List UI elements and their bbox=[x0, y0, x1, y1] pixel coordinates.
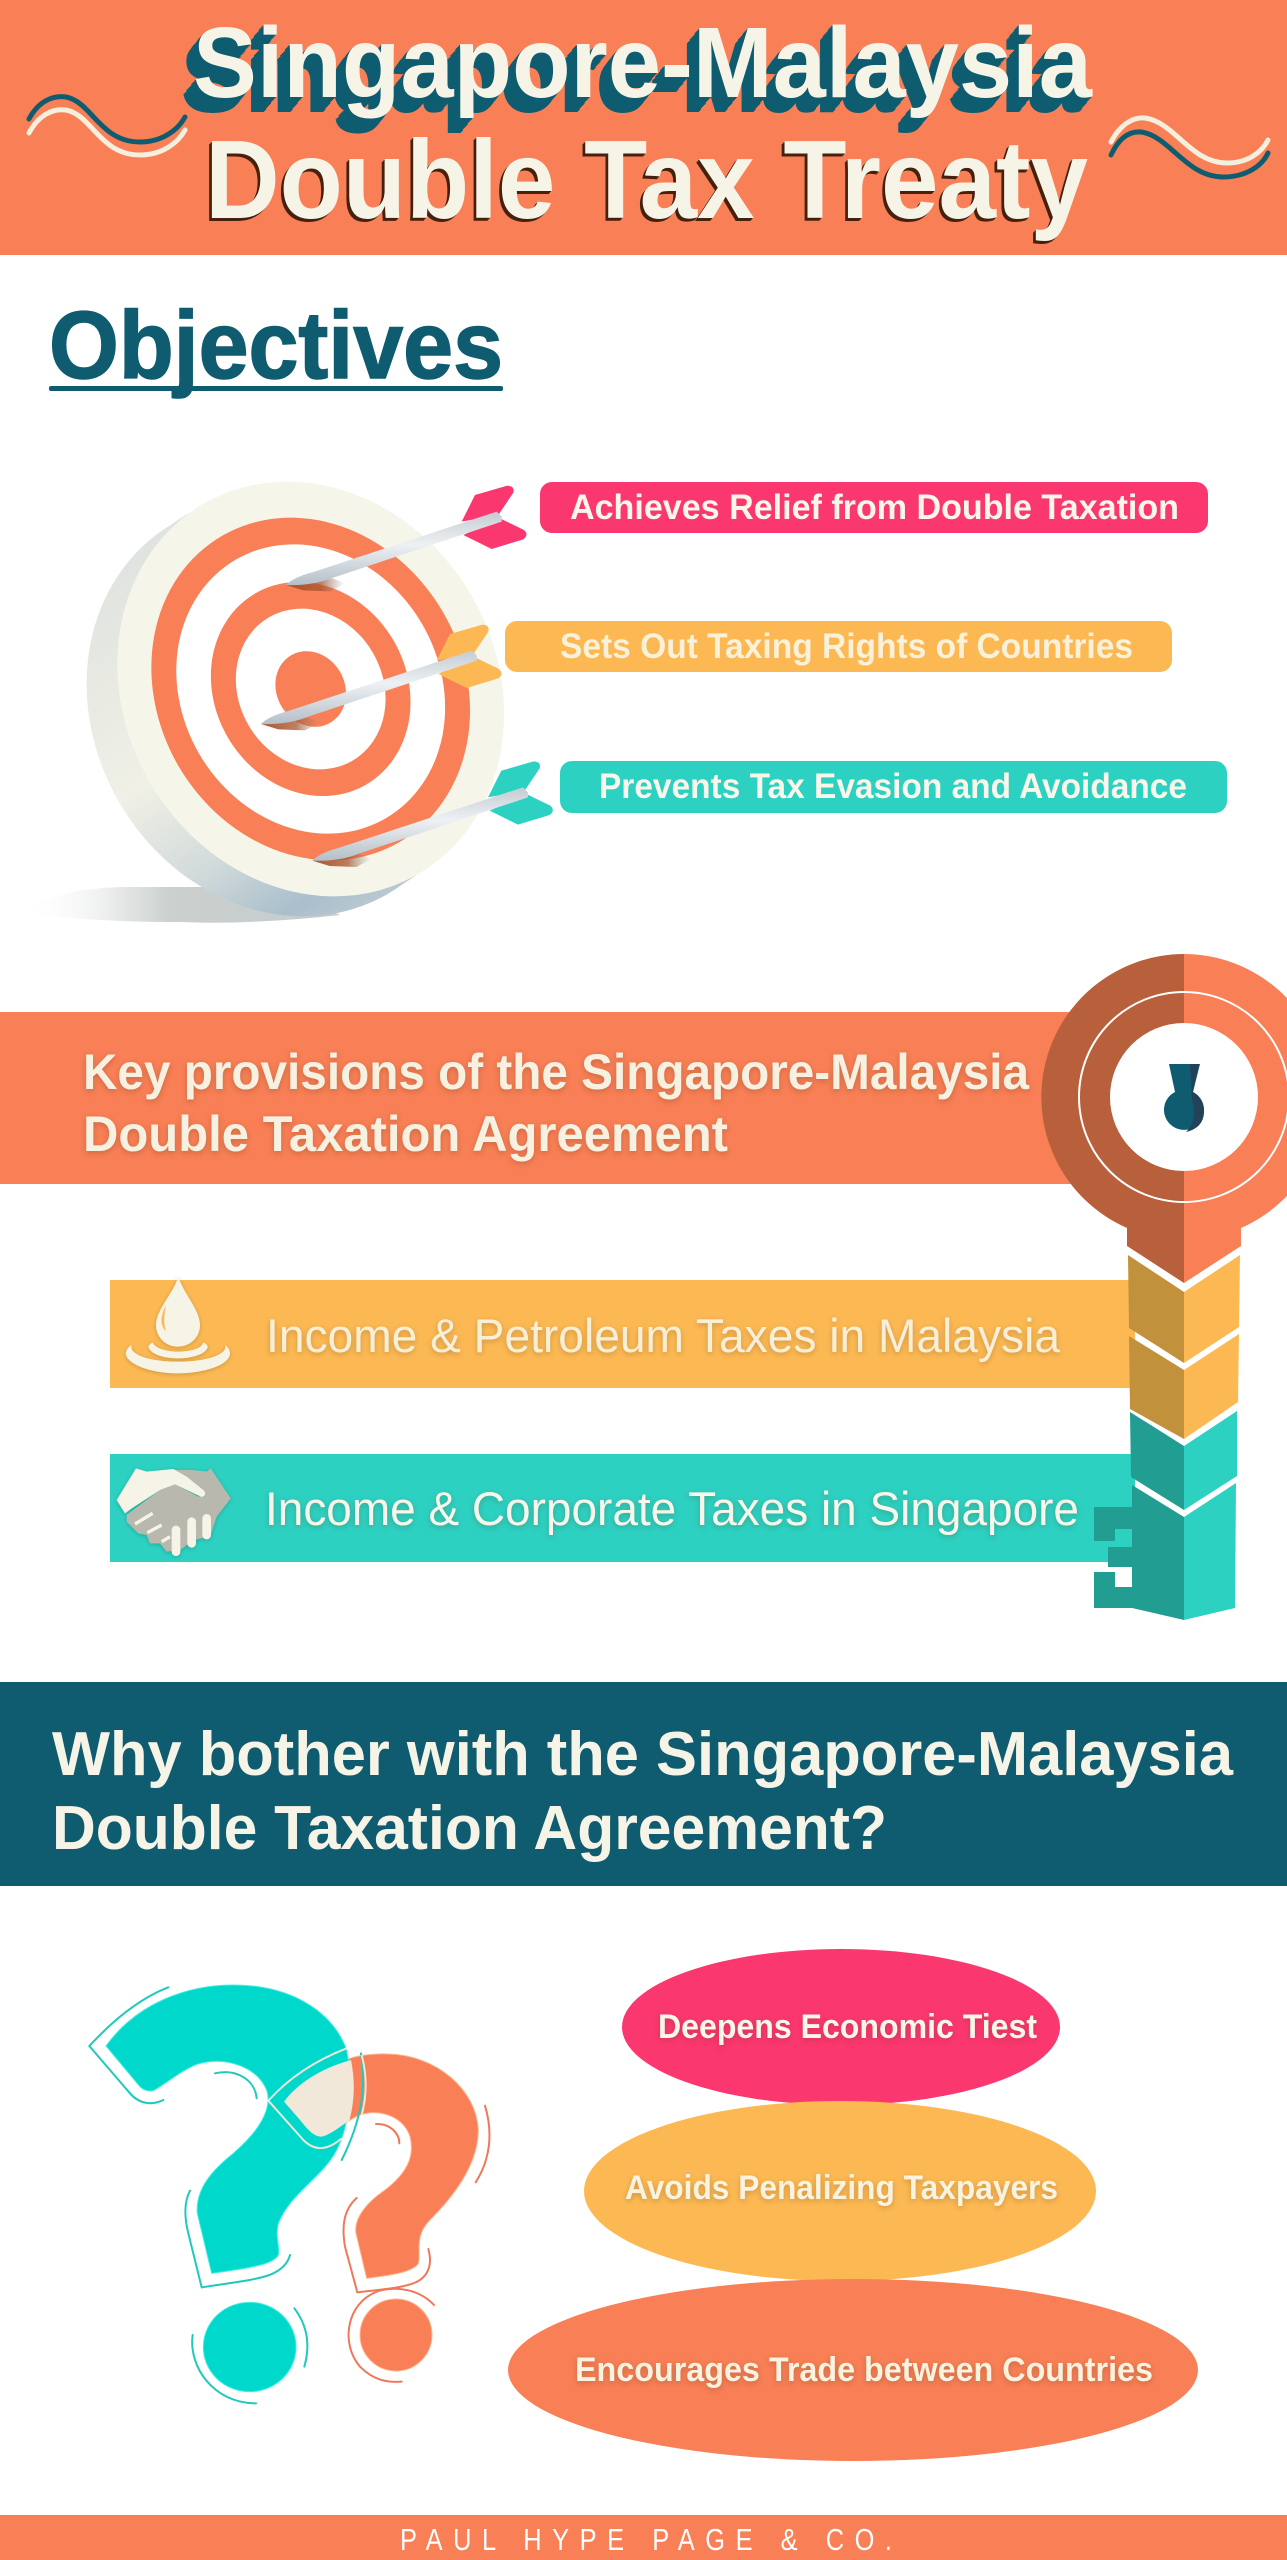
key shaft segment 1 bbox=[1128, 1255, 1240, 1363]
arrow: teal bbox=[312, 761, 553, 867]
banner: key provisions: Key provisions of the Singapore-Malaysia bbox=[83, 1044, 1030, 1100]
key illustration bbox=[1041, 954, 1287, 1620]
key bit bbox=[1094, 1483, 1236, 1620]
bar: Singapore taxes: Income & Corporate Taxes in Singapore bbox=[265, 1482, 1079, 1535]
ellipse: economic ties: Deepens Economic Tiest bbox=[658, 2008, 1037, 2046]
footer bbox=[0, 2515, 1287, 2560]
title banner bbox=[0, 0, 1287, 255]
footer: PAUL HYPE PAGE & CO. bbox=[400, 2523, 892, 2558]
ellipse: penalizing taxpayers bbox=[584, 2101, 1096, 2281]
ellipse: penalizing taxpayers: Avoids Penalizing Taxpayers bbox=[625, 2169, 1058, 2207]
bar: Malaysia taxes: Income & Petroleum Taxes in Malaysia bbox=[266, 1309, 1061, 1362]
icon: oil drop bbox=[126, 1277, 230, 1373]
overlap of question marks bbox=[268, 2048, 366, 2148]
banner: why bother: Double Taxation Agreement? bbox=[52, 1794, 887, 1863]
orange question mark bbox=[284, 2054, 489, 2382]
target illustration with arrows bbox=[12, 411, 579, 987]
bar: Malaysia taxes bbox=[110, 1277, 1135, 1388]
ellipse: economic ties bbox=[622, 1949, 1060, 2105]
objective pill: evasion bbox=[560, 761, 1227, 813]
banner: why bother bbox=[0, 1682, 1287, 1886]
title line 2: Double Tax Treaty bbox=[205, 118, 1088, 242]
key head bbox=[1041, 954, 1287, 1283]
banner: key provisions bbox=[0, 1012, 1090, 1184]
wave: right bbox=[1111, 118, 1268, 177]
heading: objectives: Objectives bbox=[49, 292, 503, 399]
ground shadow bbox=[20, 887, 340, 923]
ellipse: trade bbox=[508, 2279, 1198, 2461]
icon: handshake bbox=[117, 1468, 231, 1552]
title line 1: Singapore-Malaysia bbox=[193, 7, 1093, 119]
target side bbox=[12, 421, 563, 987]
key shaft segment 2 bbox=[1129, 1334, 1239, 1439]
objective pill: taxing rights bbox=[505, 621, 1172, 672]
wave: left bbox=[29, 97, 185, 155]
target face bbox=[43, 411, 579, 967]
question marks illustration bbox=[89, 1985, 489, 2403]
objective pill: evasion: Prevents Tax Evasion and Avoidance bbox=[599, 767, 1187, 806]
key shaft segment 3 bbox=[1130, 1411, 1237, 1510]
arrow: pink bbox=[286, 486, 527, 591]
arrow: orange bbox=[261, 625, 502, 730]
banner: why bother: Why bother with the Singapore-Malaysia bbox=[52, 1720, 1234, 1789]
keyhole bbox=[1164, 1064, 1204, 1132]
banner: key provisions: Double Taxation Agreement bbox=[83, 1106, 728, 1162]
ellipse: trade: Encourages Trade between Countries bbox=[575, 2351, 1153, 2389]
objective pill: relief: Achieves Relief from Double Taxation bbox=[570, 488, 1179, 527]
bar: Singapore taxes bbox=[110, 1454, 1135, 1562]
objective pill: taxing rights: Sets Out Taxing Rights of Countries bbox=[560, 627, 1133, 666]
teal question mark bbox=[89, 1985, 363, 2403]
